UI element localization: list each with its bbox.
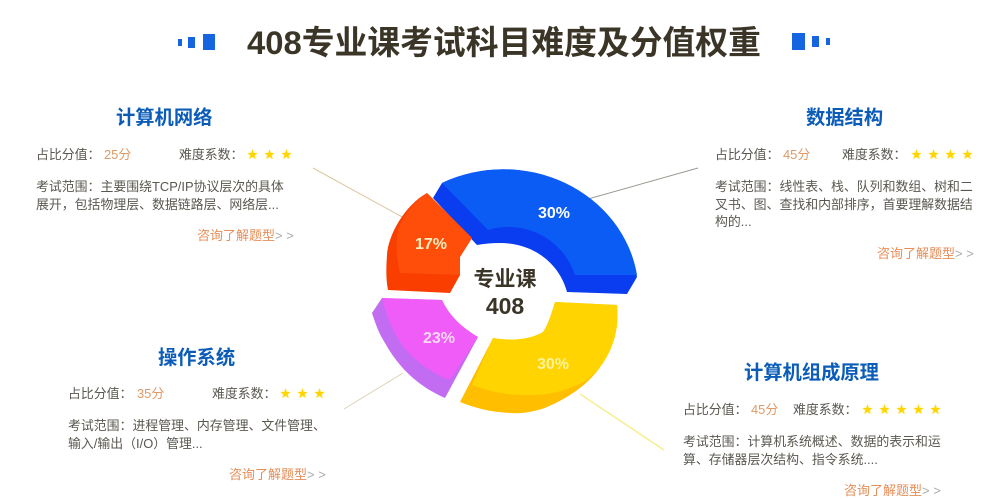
heading: 计算机组成原理 xyxy=(744,363,879,384)
title: 408专业课考试科目难度及分值权重 xyxy=(247,24,761,61)
panel: computer organization xyxy=(683,362,947,498)
icon: left title bars xyxy=(178,34,215,50)
icon: stars: ★★★★ xyxy=(911,149,979,161)
icon: stars: ★★★ xyxy=(280,388,331,400)
icon: stars: ★★★ xyxy=(247,149,298,161)
score value: 45分 xyxy=(783,147,810,162)
link: 咨询了解题型> > xyxy=(197,228,294,243)
scope: 考试范围：计算机系统概述、数据的表示和运 xyxy=(683,434,941,449)
link: 咨询了解题型> > xyxy=(877,246,974,261)
scope: 构的... xyxy=(715,214,752,229)
center label: 408 xyxy=(486,293,524,319)
scope xyxy=(36,179,284,212)
purple segment 23% xyxy=(372,298,478,398)
score label: 占比分值： xyxy=(36,147,100,162)
panel: data structures xyxy=(715,107,979,261)
leader line: computer organization xyxy=(580,394,664,450)
scope: 算、存储器层次结构、指令系统.... xyxy=(683,452,878,467)
scope: 考试范围：主要围绕TCP/IP协议层次的具体 xyxy=(36,179,284,194)
scope: 考试范围：进程管理、内存管理、文件管理、 xyxy=(68,418,326,433)
panel: computer networks xyxy=(36,107,298,243)
score value: 35分 xyxy=(137,386,164,401)
difficulty: 难度系数： xyxy=(842,147,906,162)
scope: 叉书、图、查找和内部排序，首要理解数据结 xyxy=(715,197,973,212)
score value: 45分 xyxy=(751,402,778,417)
yellow segment 30%: 30% xyxy=(537,356,569,373)
scope xyxy=(68,418,326,451)
yellow segment 30% xyxy=(460,302,617,413)
scope xyxy=(715,179,973,229)
difficulty: 难度系数： xyxy=(179,147,243,162)
heading: 计算机网络 xyxy=(116,108,212,129)
scope: 考试范围：线性表、栈、队列和数组、树和二 xyxy=(715,179,973,194)
leader line: operating system xyxy=(344,373,403,409)
heading: 数据结构 xyxy=(806,108,883,129)
center label xyxy=(474,268,536,319)
blue segment 30%: 30% xyxy=(538,205,570,222)
score label: 占比分值： xyxy=(68,386,132,401)
panel: operating systems xyxy=(68,347,331,482)
purple segment 23%: 23% xyxy=(423,330,455,347)
leader line: network xyxy=(313,168,404,218)
blue segment 30% xyxy=(433,169,637,294)
score value: 25分 xyxy=(104,147,131,162)
difficulty: 难度系数： xyxy=(793,402,857,417)
link: 咨询了解题型> > xyxy=(229,467,326,482)
leader line: data structure xyxy=(588,168,698,199)
red segment 17%: 17% xyxy=(415,236,447,253)
scope: 展开，包括物理层、数据链路层、网络层... xyxy=(36,197,279,212)
score label: 占比分值： xyxy=(715,147,779,162)
difficulty: 难度系数： xyxy=(212,386,276,401)
heading: 操作系统 xyxy=(158,348,235,369)
red segment 17% xyxy=(386,193,472,293)
center label: 专业课 xyxy=(474,268,536,291)
icon: right title bars xyxy=(792,33,830,50)
scope: 输入/输出（I/O）管理... xyxy=(68,436,203,451)
score label: 占比分值： xyxy=(683,402,747,417)
icon: stars: ★★★★★ xyxy=(862,404,947,416)
link: 咨询了解题型> > xyxy=(844,483,941,498)
scope xyxy=(683,434,941,467)
